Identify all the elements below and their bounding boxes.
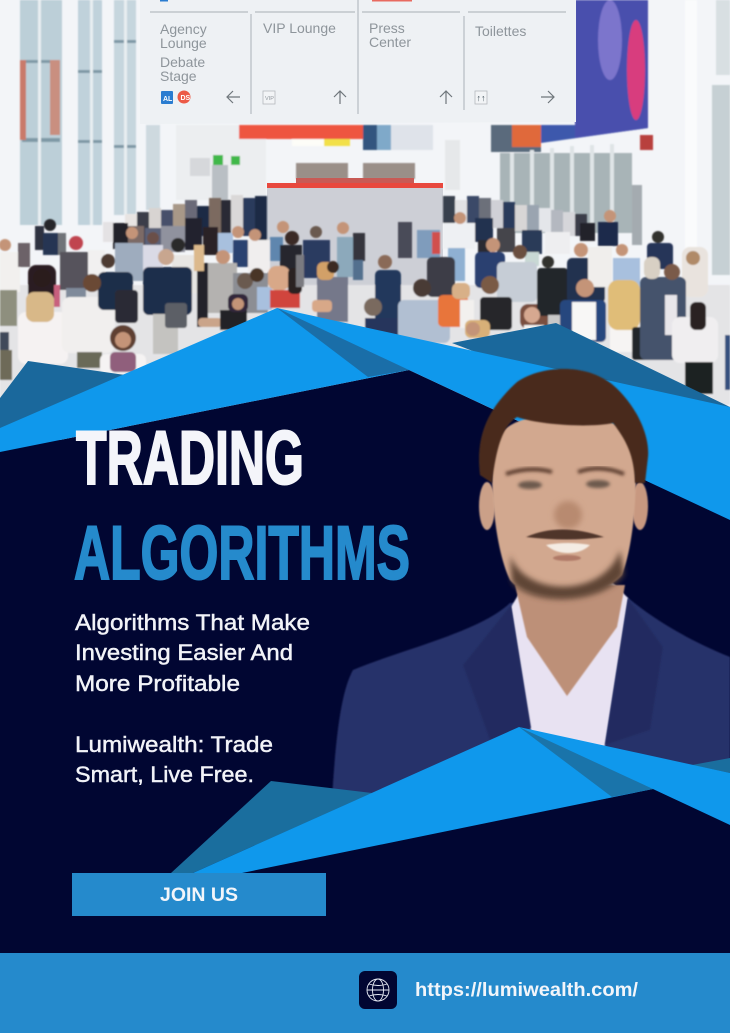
icon: globe	[359, 971, 397, 1009]
hanging direction sign: Center	[369, 34, 411, 50]
lower mountains	[171, 727, 730, 873]
far end of the hall	[176, 125, 460, 200]
button: join us: JOIN US	[160, 885, 238, 906]
hanging direction sign: Stage	[160, 68, 197, 84]
crowd	[0, 195, 730, 405]
hanging direction sign: Lounge	[160, 35, 207, 51]
hanging direction sign: Agency	[160, 21, 207, 37]
suit jacket	[332, 597, 730, 800]
right teal sliver	[692, 758, 730, 773]
tagline text	[75, 610, 310, 787]
moustache and smile	[526, 530, 604, 540]
upper mountains	[0, 308, 730, 520]
right teal peak	[452, 323, 730, 407]
title: ALGORITHMS	[74, 511, 410, 596]
bright blue band	[0, 308, 730, 520]
footer bar	[0, 953, 730, 1033]
hanging direction sign: Debate	[160, 54, 205, 70]
back row figures	[103, 222, 114, 242]
website url: https://lumiwealth.com/	[415, 980, 639, 1001]
title	[74, 416, 410, 596]
left glass facade	[20, 0, 160, 225]
far row	[125, 195, 587, 246]
nose	[554, 501, 582, 529]
button: join us	[72, 873, 326, 916]
hanging direction sign: Toilettes	[475, 23, 526, 39]
right figures	[375, 270, 401, 323]
tagline text: Investing Easier And	[75, 640, 293, 665]
hanging direction sign: Press	[369, 20, 405, 36]
hanging direction sign: AL	[163, 96, 173, 103]
left figures	[0, 252, 20, 292]
left teal peak	[171, 781, 372, 873]
exhibition stand wall	[267, 178, 443, 286]
ears	[479, 482, 495, 530]
left teal peak	[0, 361, 125, 430]
photo: exhibition hall crowd	[0, 0, 730, 440]
face	[492, 415, 636, 596]
hanging direction sign: VIP Lounge	[263, 20, 336, 36]
heads	[0, 210, 700, 351]
stubble	[510, 550, 624, 599]
tagline text: Smart, Live Free.	[75, 762, 254, 787]
shirt	[511, 570, 628, 760]
floor	[0, 285, 730, 405]
lapels	[463, 598, 663, 745]
hanging direction sign: VIP	[265, 96, 274, 102]
right storefronts and banner	[491, 0, 730, 275]
title: TRADING	[76, 416, 304, 501]
tagline text: Algorithms That Make	[75, 610, 310, 635]
hair	[479, 369, 648, 483]
bright blue band	[193, 727, 730, 873]
navy hero panel	[0, 370, 730, 953]
portrait: smiling man in navy suit	[332, 369, 730, 800]
lower navy panel	[0, 789, 730, 953]
neck	[515, 585, 625, 696]
shaded fold	[519, 727, 653, 797]
hanging direction sign	[140, 0, 576, 124]
shaded fold	[277, 308, 409, 377]
hanging direction sign: ↑↑	[476, 93, 486, 103]
eyes and brows	[506, 468, 624, 489]
tagline text: Lumiwealth: Trade	[75, 732, 273, 757]
hanging direction sign: DS	[180, 95, 191, 102]
tagline text: More Profitable	[75, 671, 240, 696]
